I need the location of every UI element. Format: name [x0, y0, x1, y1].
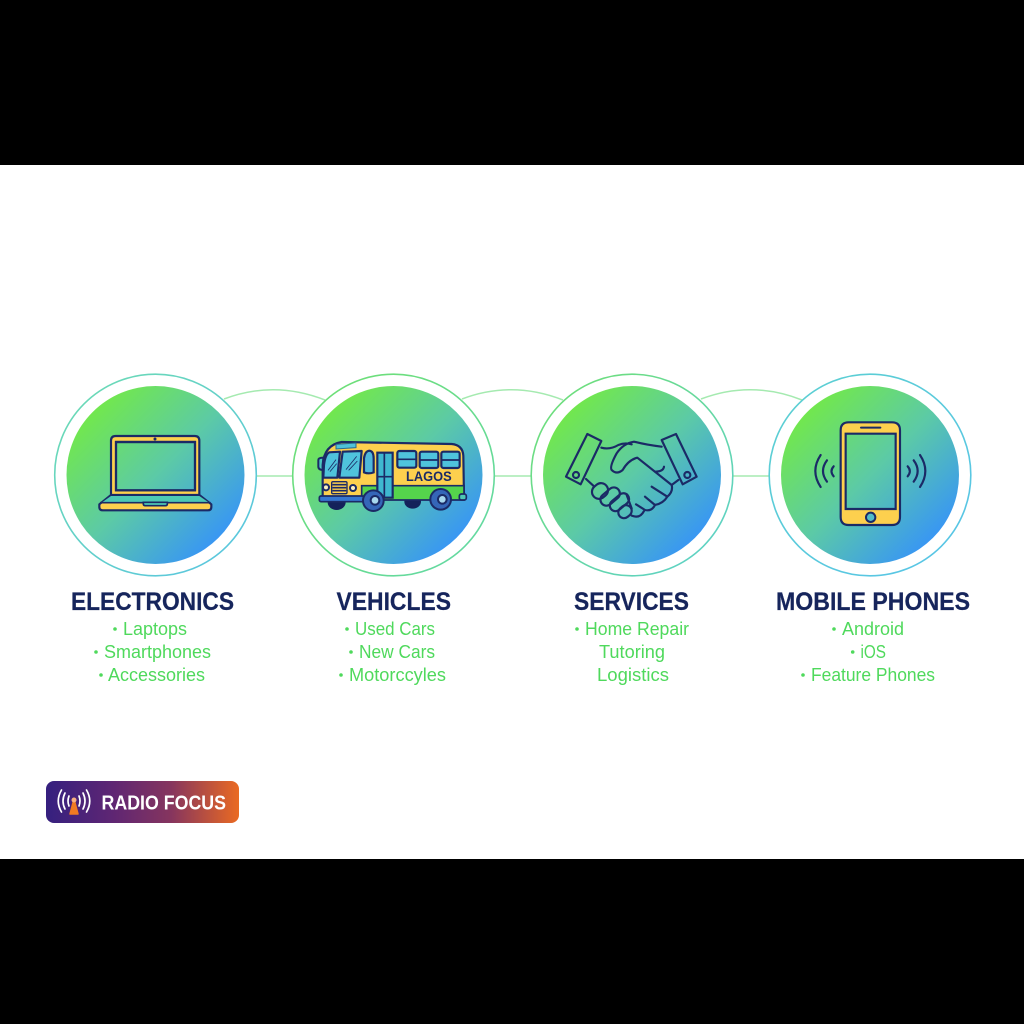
services circle — [531, 374, 733, 576]
list: electronics: Smartphones — [104, 642, 211, 662]
heading: services: SERVICES — [574, 588, 689, 616]
list: mobile phones: Feature Phones — [811, 665, 935, 685]
list: mobile phones — [801, 619, 935, 685]
panel: vehicles — [293, 374, 494, 685]
list: vehicles: Motorccyles — [349, 665, 446, 685]
list: vehicles: Used Cars — [355, 619, 435, 639]
icon: radio tower — [58, 790, 90, 814]
electronics circle — [55, 374, 256, 576]
heading: vehicles: VEHICLES — [336, 588, 451, 616]
vehicles circle — [293, 374, 494, 576]
list: electronics: Accessories — [108, 665, 205, 685]
panel: electronics — [55, 374, 256, 685]
label: LAGOS: LAGOS — [406, 469, 452, 484]
background panel — [0, 165, 1024, 859]
panel: services — [531, 374, 733, 685]
connectors between circles — [224, 390, 802, 476]
list: electronics: Laptops — [123, 619, 187, 639]
list: services: Tutoring — [599, 642, 665, 662]
list: services: Home Repair — [585, 619, 689, 639]
list: services: Logistics — [597, 665, 669, 685]
list: electronics — [94, 619, 211, 685]
icon: laptop — [99, 436, 211, 510]
icon: handshake — [566, 434, 697, 521]
badge label: RADIO FOCUS — [102, 792, 226, 814]
list: services — [575, 619, 689, 685]
list: vehicles: New Cars — [359, 642, 435, 662]
list: mobile phones: iOS — [860, 642, 886, 662]
heading: electronics: ELECTRONICS — [71, 588, 234, 616]
icon: bus — [318, 442, 466, 511]
heading: mobile phones: MOBILE PHONES — [776, 588, 970, 616]
list: vehicles — [339, 619, 446, 685]
list: mobile phones: Android — [842, 619, 904, 639]
badge: radio focus — [46, 781, 239, 823]
panel: mobile phones — [769, 374, 971, 685]
mobile phones circle — [769, 374, 971, 576]
icon: smartphone with signal waves — [815, 422, 925, 525]
